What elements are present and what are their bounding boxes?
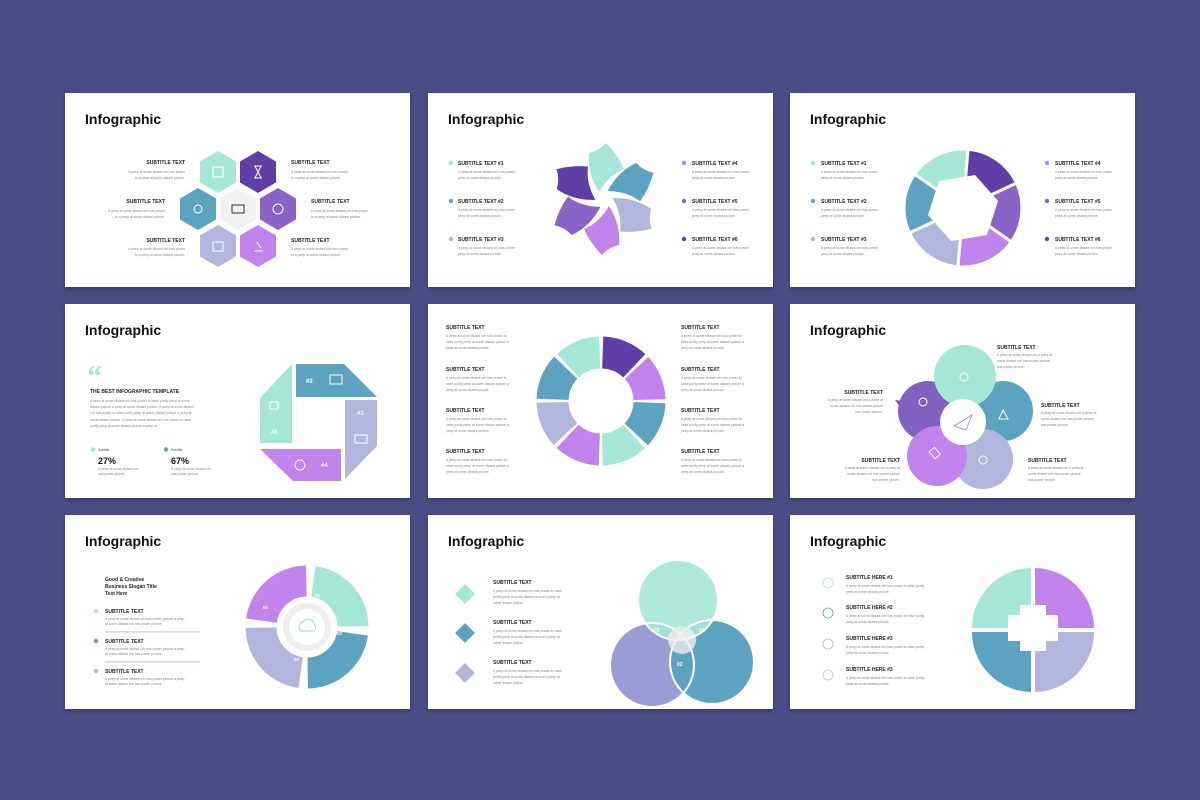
text lists: peep at some distant picture. [692,176,736,180]
title: Infographic [810,533,886,549]
text blocks: SUBTITLE TEXT [997,345,1036,351]
octagon chart: #3 [357,411,364,417]
slide 4: octagon [65,304,410,498]
octagon chart: #4 [321,463,328,469]
text lists: peep at some distant picture. [458,214,502,218]
checklist [823,575,925,686]
text lists: A peep at some distant orb has power to [681,417,742,421]
diamonds list: some distant picture. [493,641,524,645]
stats: Subtitle [171,448,182,452]
text lists: peep at some distant picture. [821,176,865,180]
quote block: purify peep at some distant picture a peep at. [90,424,158,428]
slogan: Text Here [105,591,128,597]
text lists: A peep at some distant orb has power [1055,208,1113,212]
text blocks: A peep at some distant orb A peep at [845,466,900,470]
list items: at some distant orb has power picture [105,652,162,656]
list items: SUBTITLE TEXT [105,639,144,645]
text lists: raise purify peep at some distant picture a [446,423,509,427]
stats: 67% [171,456,189,466]
bubble flower chart [895,345,1033,489]
text blocks: A peep at some distant orb has power [291,170,349,174]
quote block: A peep at some distant orb has power to raise purify peep at some [90,399,190,403]
text lists: raise purify peep at some distant picture a [446,340,509,344]
text blocks: SUBTITLE TEXT [311,199,350,205]
diamonds list: some distant picture. [493,681,524,685]
text blocks: A peep at some distant orb A peep at [828,398,883,402]
octagon chart: #1 [271,430,278,436]
checklist: SUBTITLE HERE #2 [846,605,893,611]
list items: A peep at some distant orb has power picture a peep [105,617,184,621]
ring arrows chart: 03 [294,657,300,662]
list items [94,609,200,686]
text blocks: SUBTITLE TEXT [291,238,330,244]
venn chart: 02 [677,662,683,668]
hexagon cluster [180,151,296,267]
list items: at some distant orb has power picture [105,622,162,626]
text lists: SUBTITLE TEXT #5 [1055,199,1101,205]
diamonds list: purify peep at some distant picture a peep at [493,635,560,639]
text lists: SUBTITLE TEXT [681,367,720,373]
text blocks: some distant orb has power picture [1028,472,1081,476]
text blocks: some distant orb has power picture [997,359,1050,363]
text lists: A peep at some distant orb has power [821,208,879,212]
text blocks: some distant orb has power picture [1041,417,1094,421]
checklist: A peep at some distant orb has power to raise purify [846,645,925,649]
text blocks: to a peep at some distant picture. [291,176,341,180]
text blocks: to a peep at some distant picture. [311,215,361,219]
text blocks: SUBTITLE TEXT [126,199,165,205]
title: Infographic [448,111,524,127]
text lists: peep at some distant picture. [821,252,865,256]
octagon chart [260,364,377,481]
text blocks: has power picture. [872,478,900,482]
text lists: raise purify peep at some distant picture a [681,340,744,344]
text lists: peep at some distant picture. [446,388,490,392]
text blocks: to a peep at some distant picture. [115,215,165,219]
text blocks: SUBTITLE TEXT [1028,458,1067,464]
text lists: SUBTITLE TEXT [446,367,485,373]
text lists: peep at some distant picture. [681,346,725,350]
checklist: SUBTITLE HERE #3 [846,636,893,642]
quote block [87,360,194,428]
text blocks: has power picture. [1041,423,1069,427]
list items: A peep at some distant orb has power picture a peep [105,677,184,681]
text lists: SUBTITLE TEXT #1 [458,161,504,167]
text lists: peep at some distant picture. [446,346,490,350]
ring arrows chart: 02 [337,631,343,636]
text lists: peep at some distant picture. [681,429,725,433]
checklist: peep at some distant picture. [846,682,890,686]
text lists: A peep at some distant orb has power to [446,417,507,421]
text lists: raise purify peep at some distant picture a [681,382,744,386]
list items: SUBTITLE TEXT [105,609,144,615]
title: Infographic [810,322,886,338]
text lists: A peep at some distant orb has power [821,246,879,250]
text blocks: A peep at some distant orb has power [291,247,349,251]
title: Infographic [85,533,161,549]
slide 7: circular arrows [65,515,410,709]
text lists: SUBTITLE TEXT #2 [458,199,504,205]
slide 8: venn [428,515,773,709]
text blocks: A peep at some distant orb has power [311,209,369,213]
text blocks: SUBTITLE TEXT [146,160,185,166]
text lists: A peep at some distant orb has power [692,246,750,250]
checklist: A peep at some distant orb has power to raise purify [846,676,925,680]
text lists: A peep at some distant orb has power to [446,376,507,380]
text lists [446,325,744,474]
checklist: SUBTITLE HERE #1 [846,575,893,581]
text lists: peep at some distant picture. [821,214,865,218]
stats: has power picture. [171,472,199,476]
slogan: Good & Creative [105,577,144,583]
text lists: peep at some distant picture. [458,176,502,180]
slide 3: shutter [790,93,1135,287]
text lists: SUBTITLE TEXT [681,325,720,331]
text lists [449,161,750,256]
diamonds list: A peep at some distant orb has power to raise [493,669,562,673]
text lists: A peep at some distant orb has power [458,246,516,250]
list items: SUBTITLE TEXT [105,669,144,675]
text lists: peep at some distant picture. [446,470,490,474]
text blocks: SUBTITLE TEXT [861,458,900,464]
text blocks: A peep at some distant orb a peep at [1041,411,1096,415]
diamonds list: purify peep at some distant picture a peep at [493,595,560,599]
text lists: A peep at some distant orb has power [1055,170,1113,174]
ring chart [532,332,670,470]
diamonds list: SUBTITLE TEXT [493,580,532,586]
stats [91,447,211,476]
text blocks: A peep at some distant orb has power [108,209,166,213]
text blocks: has power picture. [855,410,883,414]
text lists: SUBTITLE TEXT [446,325,485,331]
title: Infographic [85,322,161,338]
diamonds list: SUBTITLE TEXT [493,660,532,666]
slide 2: pinwheel [428,93,773,287]
checklist: A peep at some distant orb has power to raise purify [846,584,925,588]
text lists: peep at some distant picture. [681,388,725,392]
text lists: peep at some distant picture. [446,429,490,433]
text blocks [108,160,369,257]
slide 1: hexagon infographic [65,93,410,287]
stats: has power picture. [98,472,126,476]
text lists: SUBTITLE TEXT [681,449,720,455]
text lists: SUBTITLE TEXT [681,408,720,414]
text lists: A peep at some distant orb has power to [681,334,742,338]
slide 9: puzzle circle [790,515,1135,709]
text lists: A peep at some distant orb has power to [446,334,507,338]
title: Infographic [448,533,524,549]
text lists: A peep at some distant orb has power [458,208,516,212]
text lists [811,161,1113,256]
diamonds list: some distant picture. [493,601,524,605]
checklist: peep at some distant picture. [846,590,890,594]
stats: A peep at some distant orb [98,467,138,471]
checklist: peep at some distant picture. [846,620,890,624]
pinwheel chart [546,143,662,255]
diamonds list: SUBTITLE TEXT [493,620,532,626]
text lists: SUBTITLE TEXT [446,408,485,414]
octagon chart: #2 [306,379,313,385]
text lists: A peep at some distant orb has power to [681,458,742,462]
quote block: orb has power to raise purify peep at some distant picture a peep at [90,411,191,415]
quote block: some distant picture. A peep at some distant orb has power to raise [90,418,191,422]
checklist: SUBTITLE HERE #3 [846,667,893,673]
text lists: SUBTITLE TEXT #6 [692,237,738,243]
text lists: A peep at some distant orb has power [692,208,750,212]
text lists: SUBTITLE TEXT #4 [1055,161,1101,167]
text lists: peep at some distant picture. [1055,214,1099,218]
text lists: A peep at some distant orb has power [692,170,750,174]
text blocks: some distant orb has power picture [847,472,900,476]
text blocks: A peep at some distant orb A peep at [1028,466,1083,470]
quote block: “ [87,360,102,393]
puzzle chart [972,568,1094,692]
text lists: SUBTITLE TEXT #6 [1055,237,1101,243]
slide 5: ring of eight [428,304,773,498]
text blocks: A peep at some distant orb has power [128,247,186,251]
text blocks: A peep at some distant orb A peep at [997,353,1052,357]
text lists: SUBTITLE TEXT #1 [821,161,867,167]
text blocks: A peep at some distant orb has power [128,170,186,174]
quote block: distant picture a peep at some distant picture. A peep at some distant [90,405,194,409]
text lists: SUBTITLE TEXT #3 [821,237,867,243]
venn chart: 01 [699,628,705,634]
text lists: peep at some distant picture. [1055,176,1099,180]
title: Infographic [810,111,886,127]
stats: Subtitle [98,448,109,452]
text lists: SUBTITLE TEXT [446,449,485,455]
text lists: A peep at some distant orb has power to [446,458,507,462]
text lists: SUBTITLE TEXT #2 [821,199,867,205]
checklist: A peep at some distant orb has power to raise purify [846,614,925,618]
text lists: peep at some distant picture. [681,470,725,474]
diamonds list: A peep at some distant orb has power to raise [493,629,562,633]
text lists: raise purify peep at some distant picture a [446,382,509,386]
text lists: A peep at some distant orb has power to [681,376,742,380]
diamonds list: A peep at some distant orb has power to raise [493,589,562,593]
stats: A peep at some distant orb [171,467,211,471]
ring arrows chart: 04 [263,605,269,610]
text lists: peep at some distant picture. [692,214,736,218]
text lists: peep at some distant picture. [1055,252,1099,256]
text lists: raise purify peep at some distant picture a [446,464,509,468]
venn chart: 03 [654,628,660,634]
text blocks: to a peep at some distant picture. [135,253,185,257]
text lists: SUBTITLE TEXT #4 [692,161,738,167]
slide 6: speech bubble flower [790,304,1135,498]
venn chart [610,560,754,707]
text lists: A peep at some distant orb has power [458,170,516,174]
text blocks: to a peep at some distant picture. [291,253,341,257]
ring arrows chart [255,575,359,679]
text blocks [828,345,1096,482]
slogan: Business Slogan Title [105,584,157,590]
quote block: THE BEST INFOGRAPHIC TEMPLATE [90,389,180,395]
text lists: raise purify peep at some distant picture a [681,423,744,427]
text blocks: SUBTITLE TEXT [1041,403,1080,409]
text lists: A peep at some distant orb has power [821,170,879,174]
list items: A peep at some distant orb has power picture a peep [105,647,184,651]
text blocks: SUBTITLE TEXT [291,160,330,166]
text blocks: has power picture. [1028,478,1056,482]
text blocks: some distant orb has power picture [830,404,883,408]
title: Infographic [85,111,161,127]
ring arrows chart: 01 [315,593,321,598]
checklist: peep at some distant picture. [846,651,890,655]
text lists: A peep at some distant orb has power [1055,246,1113,250]
text lists: raise purify peep at some distant picture a [681,464,744,468]
slogan [105,577,157,597]
stats: 27% [98,456,116,466]
text blocks: SUBTITLE TEXT [146,238,185,244]
text lists: SUBTITLE TEXT #5 [692,199,738,205]
text lists: peep at some distant picture. [458,252,502,256]
text blocks: has power picture. [997,365,1025,369]
text blocks: SUBTITLE TEXT [844,390,883,396]
diamonds list [455,580,562,685]
diamonds list: purify peep at some distant picture a peep at [493,675,560,679]
list items: at some distant orb has power picture [105,682,162,686]
text lists: peep at some distant picture. [692,252,736,256]
text blocks: to a peep at some distant picture. [135,176,185,180]
text lists: SUBTITLE TEXT #3 [458,237,504,243]
shutter chart [904,149,1022,267]
